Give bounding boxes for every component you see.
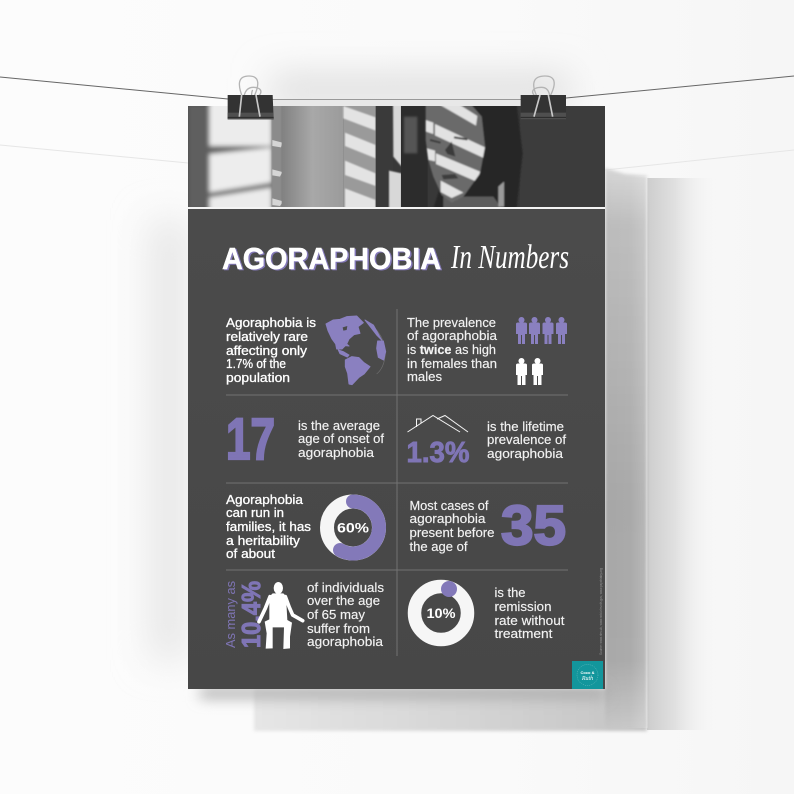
title <box>222 239 569 277</box>
panel: average age of onset <box>226 407 385 472</box>
text: over 65 description: of 65 may <box>307 608 366 622</box>
text: remission description: is the <box>494 586 526 600</box>
panel: gender prevalence <box>407 316 567 385</box>
text: over 65 description: agoraphobia <box>307 635 383 649</box>
text: lifetime description: agoraphobia <box>487 447 563 461</box>
text: prevalence statement: males <box>407 370 442 384</box>
poster cast shadow <box>200 168 717 731</box>
chart: 60% donut: 60% <box>337 520 370 536</box>
grid dividers <box>226 309 568 656</box>
hanging wire <box>0 76 794 106</box>
text: as many as: As many as <box>223 581 238 648</box>
icon: four purple figures <box>516 317 567 344</box>
text: over 65 description: of individuals <box>307 581 384 595</box>
panel: lifetime prevalence <box>406 416 567 469</box>
text: lifetime description <box>487 420 567 461</box>
icon: globe <box>326 316 386 385</box>
panel: remission rate <box>414 581 565 641</box>
text: onset description <box>298 419 385 460</box>
text: prevalence statement: is twice as high <box>407 343 496 357</box>
text: over 65 description <box>307 581 384 649</box>
text: most cases statement: present before <box>410 526 495 540</box>
text: most cases statement <box>410 499 495 554</box>
text: prevalence statement <box>407 316 497 384</box>
title: In Numbers <box>450 239 569 276</box>
text: most cases statement: Most cases of <box>410 499 489 513</box>
text: remission description <box>494 586 565 641</box>
text: prevalence statement: in females than <box>407 357 497 371</box>
icon: two white figures <box>516 358 543 385</box>
text: rarity statement: 1.7% of the <box>226 357 286 371</box>
text: remission description: rate without <box>494 614 565 628</box>
text: remission description: remission <box>494 600 552 614</box>
chart: 10% donut <box>414 581 468 640</box>
text: onset description: agoraphobia <box>298 446 374 460</box>
title: AGORAPHOBIA <box>224 243 442 277</box>
text: over 65 description: suffer from <box>307 622 370 636</box>
text: heritability statement <box>226 493 311 561</box>
panel: over 65s <box>223 581 384 649</box>
panel: onset before 35 <box>410 494 566 556</box>
source note: Source: www.nhs.uk, www.ncbi.nlm.nih.gov, www.psychiatry.org <box>599 568 603 655</box>
icon: house roof <box>408 416 468 432</box>
binder clip: right <box>521 76 566 119</box>
logo: Coco & Ruth: Coco & <box>580 670 595 675</box>
text: over 65 description: over the age <box>307 594 380 608</box>
text: rarity statement: population <box>226 371 290 385</box>
header photo: woman by window blinds <box>188 106 605 207</box>
text: rarity statement: relatively rare <box>226 330 308 344</box>
stat: 10.4%: 10.4% <box>236 581 266 648</box>
poster panel <box>188 106 605 689</box>
text: heritability statement: of about <box>226 547 276 561</box>
logo: Coco & Ruth: Ruth <box>581 676 593 682</box>
text: remission description: treatment <box>494 627 553 641</box>
panel: heritability <box>226 493 379 561</box>
title: AGORAPHOBIA <box>222 242 441 276</box>
chart: 10% donut: 10% <box>426 605 456 621</box>
text: most cases statement: the age of <box>410 540 468 554</box>
text: lifetime description: prevalence of <box>487 433 567 447</box>
divider under photo <box>188 207 605 209</box>
stat: 1.3%: 1.3% <box>406 437 470 469</box>
text: lifetime description: is the lifetime <box>487 420 564 434</box>
icon: seated man <box>259 582 303 649</box>
logo: Coco & Ruth <box>572 661 603 689</box>
text: heritability statement: a heritability <box>226 534 301 548</box>
chart: 60% donut <box>327 501 379 554</box>
text: heritability statement: families, it has <box>226 520 311 534</box>
text: heritability statement: can run in <box>226 506 284 520</box>
stat: 17: 17 <box>226 407 275 472</box>
binder clip: left <box>228 76 274 119</box>
text: prevalence statement: of agoraphobia <box>407 329 497 343</box>
panel: rarity <box>226 316 386 385</box>
text: heritability statement: Agoraphobia <box>226 493 303 507</box>
text: rarity statement: affecting only <box>226 344 308 358</box>
text: onset description: is the average <box>298 419 380 433</box>
text: prevalence statement: The prevalence <box>407 316 496 330</box>
text: rarity statement <box>226 316 316 385</box>
text: most cases statement: agoraphobia <box>410 512 486 526</box>
text: onset description: age of onset of <box>298 432 385 446</box>
text: rarity statement: Agoraphobia is <box>226 316 316 330</box>
stat: 35: 35 <box>501 494 566 556</box>
